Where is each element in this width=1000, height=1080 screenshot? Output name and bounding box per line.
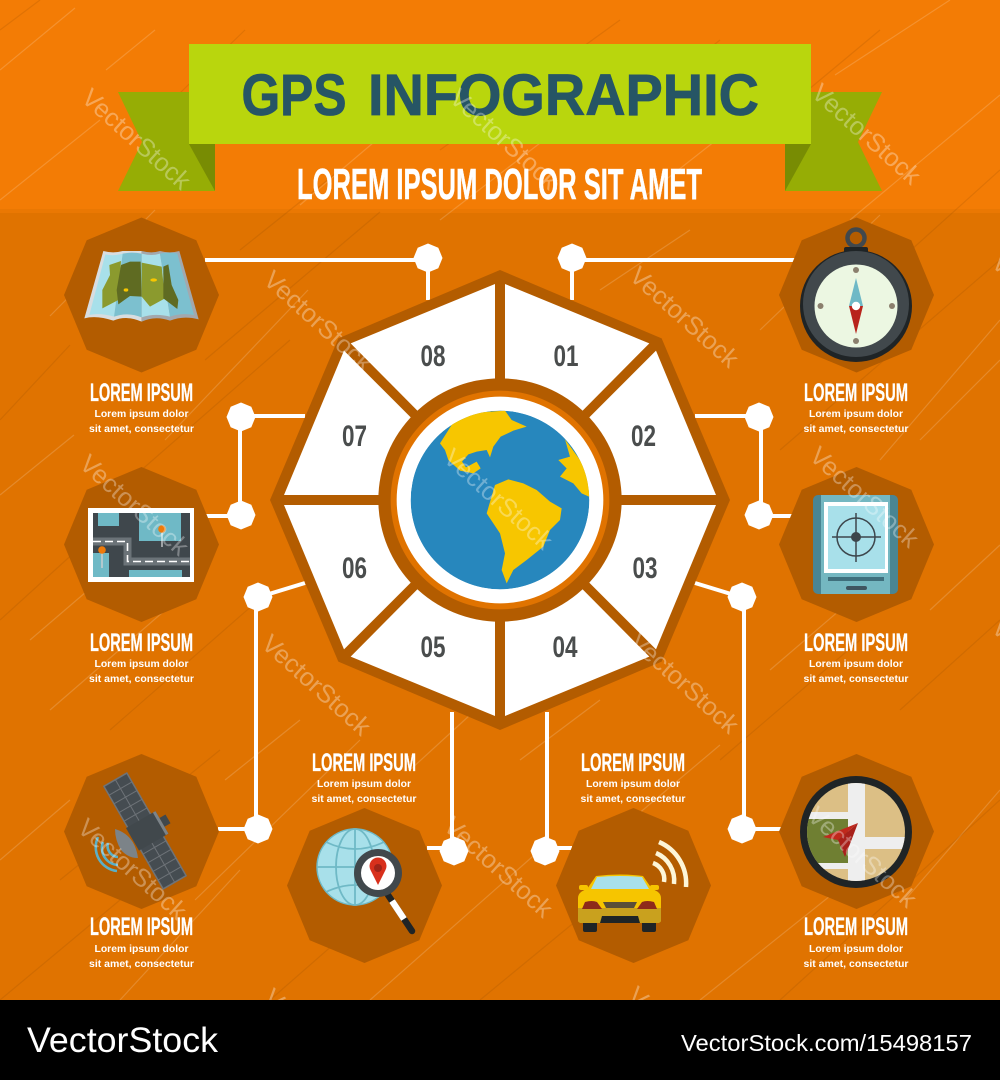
icon: folded map <box>84 251 199 322</box>
segment numbers: 01 <box>554 340 578 373</box>
label: connected car: Lorem ipsum dolor <box>586 778 680 790</box>
connectors and nodes <box>205 244 795 866</box>
label: navigator: LOREM IPSUM <box>804 913 908 941</box>
globe <box>411 411 591 589</box>
icon: gps tablet <box>813 495 898 594</box>
panel: navigator <box>779 754 934 909</box>
watermarks: VectorStock <box>74 450 194 562</box>
label: compass: sit amet, consectetur <box>804 423 908 435</box>
label: map: LOREM IPSUM <box>90 379 193 407</box>
panel: tablet <box>779 467 934 622</box>
watermarks: VectorStock <box>804 442 924 554</box>
watermarks: VectorStock <box>256 630 376 742</box>
segment numbers: 08 <box>420 340 446 373</box>
segment numbers: 02 <box>631 420 656 453</box>
watermarks: VectorStock <box>802 802 922 914</box>
icon: globe with magnifier <box>317 829 412 931</box>
label: route map: LOREM IPSUM <box>90 629 193 657</box>
ribbon left tail <box>118 92 215 191</box>
panel: route map <box>64 467 219 622</box>
subtitle: LOREM IPSUM DOLOR SIT AMET <box>297 160 702 209</box>
panel: satellite <box>64 754 219 909</box>
watermarks: VectorStock <box>806 79 926 191</box>
footer bar <box>0 1000 1000 1080</box>
banner ribbon <box>118 44 882 191</box>
panel: globe search <box>287 808 442 963</box>
watermarks: VectorStock <box>624 262 744 374</box>
label: connected car <box>580 749 686 805</box>
label: navigator <box>804 913 908 970</box>
central octagon diagram <box>270 270 730 730</box>
label: tablet: LOREM IPSUM <box>804 629 908 657</box>
watermarks: VectorStock <box>258 266 378 378</box>
label: compass <box>804 379 908 435</box>
watermarks: VectorStock <box>438 444 558 556</box>
footer url text: VectorStock.com/15498157 <box>681 1030 972 1056</box>
label: globe search: LOREM IPSUM <box>312 749 416 777</box>
watermarks: VectorStock <box>624 628 744 740</box>
label: connected car: LOREM IPSUM <box>581 749 685 777</box>
label: route map: sit amet, consectetur <box>89 673 194 685</box>
segment numbers: 05 <box>420 631 446 664</box>
label: satellite: LOREM IPSUM <box>90 913 193 941</box>
watermarks: VectorStock <box>72 814 192 926</box>
segment numbers <box>342 340 658 664</box>
ribbon left fold <box>189 144 215 191</box>
label: globe search: Lorem ipsum dolor <box>317 778 411 790</box>
hub ring <box>378 378 622 622</box>
icon: compass <box>800 230 912 362</box>
watermarks: VectorStock <box>76 84 196 196</box>
watermarks: VectorStock <box>438 812 558 924</box>
label: route map <box>89 629 194 685</box>
white segments <box>284 284 716 716</box>
ribbon right fold <box>785 144 811 191</box>
label: compass: Lorem ipsum dolor <box>809 408 903 420</box>
label: globe search <box>312 749 416 805</box>
panel: connected car <box>556 808 711 963</box>
title: GPS <box>242 63 346 128</box>
label: tablet: Lorem ipsum dolor <box>809 658 903 670</box>
icon: car with signal <box>578 842 686 932</box>
label: route map: Lorem ipsum dolor <box>94 658 188 670</box>
ribbon right tail <box>785 92 882 191</box>
label: compass: LOREM IPSUM <box>804 379 908 407</box>
label: map: sit amet, consectetur <box>89 423 194 435</box>
label: globe search: sit amet, consectetur <box>312 793 416 805</box>
segment numbers: 06 <box>342 552 367 585</box>
segment numbers: 04 <box>552 631 578 664</box>
label: map: Lorem ipsum dolor <box>94 408 188 420</box>
label: satellite <box>89 913 194 970</box>
panel: map <box>64 218 219 372</box>
label: tablet <box>804 629 908 685</box>
ribbon main band <box>189 44 811 144</box>
label: map <box>89 379 194 435</box>
segment numbers: 03 <box>632 552 658 585</box>
title: INFOGRAPHIC <box>368 63 759 128</box>
label: satellite: Lorem ipsum dolor <box>94 943 188 955</box>
icon: route map <box>88 508 194 582</box>
label: tablet: sit amet, consectetur <box>804 673 908 685</box>
footer logo text: VectorStock <box>27 1021 219 1060</box>
watermarks: VectorStock <box>444 84 564 196</box>
icon: satellite <box>96 766 198 890</box>
segment numbers: 07 <box>342 420 367 453</box>
octagon frame <box>270 270 730 730</box>
label: connected car: sit amet, consectetur <box>580 793 686 805</box>
panel: compass <box>779 218 934 372</box>
icon: round navigation map <box>800 776 912 888</box>
label: navigator: Lorem ipsum dolor <box>809 943 903 955</box>
label: satellite: sit amet, consectetur <box>89 958 194 970</box>
label: navigator: sit amet, consectetur <box>804 958 908 970</box>
